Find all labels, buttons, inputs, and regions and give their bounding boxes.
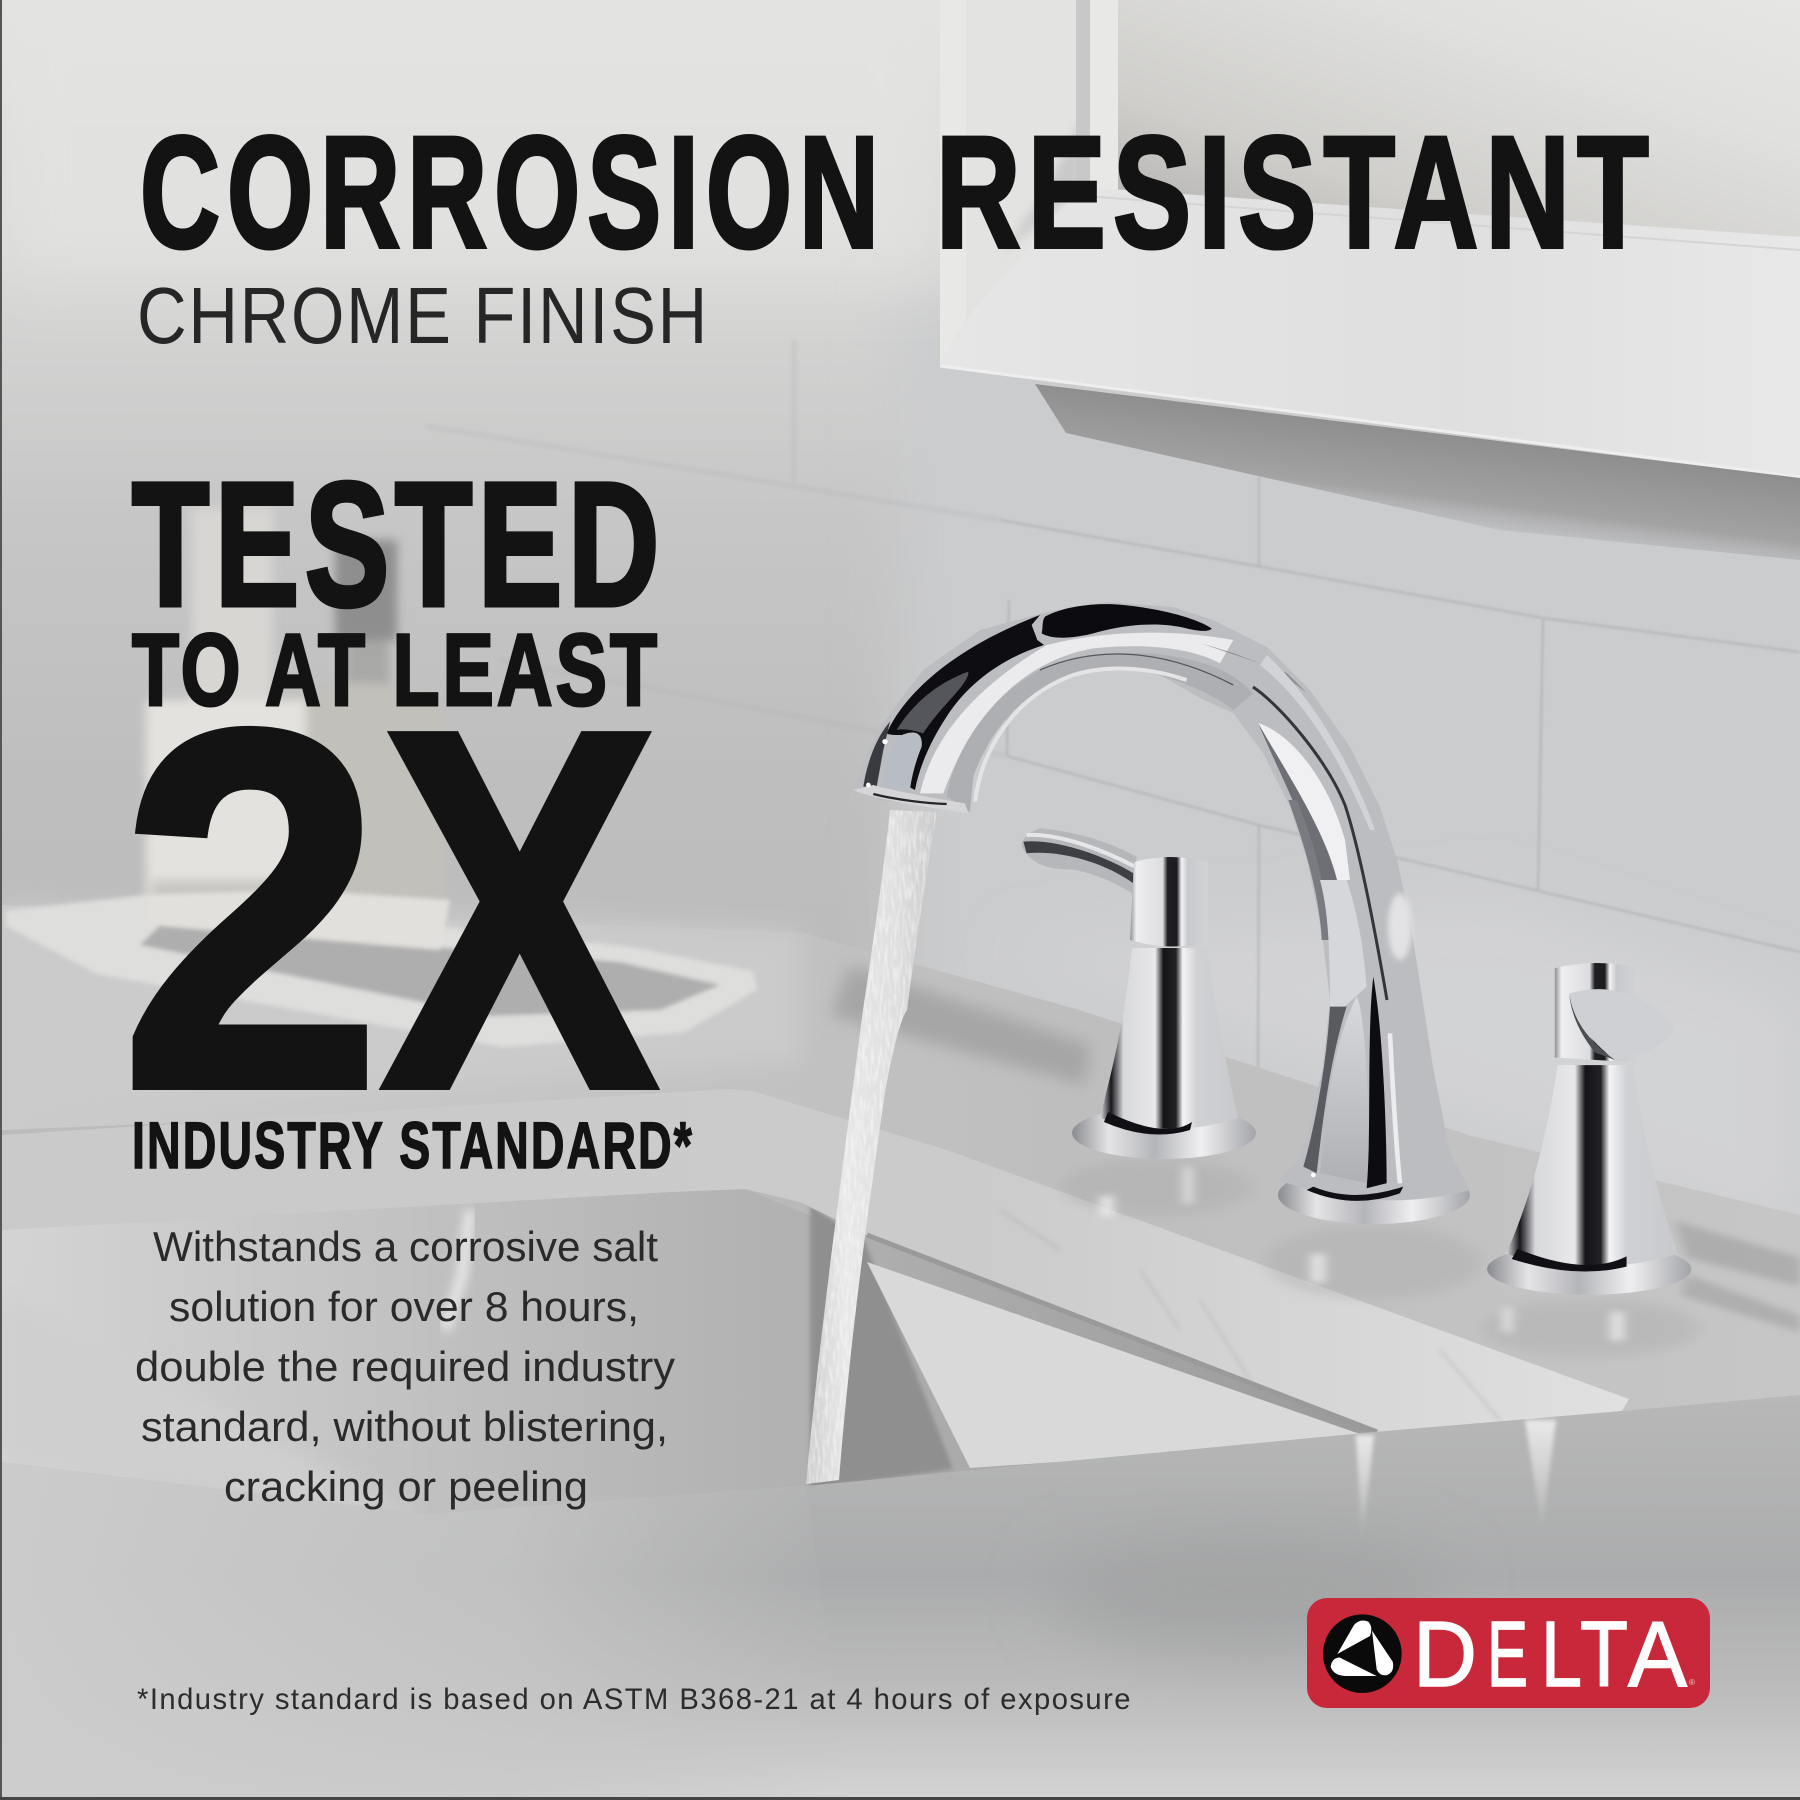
handle lever xyxy=(1022,828,1137,894)
arch highlights xyxy=(853,604,1253,813)
wordmark: A xyxy=(1628,1602,1687,1706)
mirror and white frame xyxy=(940,0,1800,477)
faint blurred left tile lines xyxy=(426,340,1007,756)
back counter xyxy=(0,905,1800,1411)
registered mark: ® xyxy=(1689,1678,1695,1687)
shadow under frame xyxy=(1035,384,1800,560)
faucet shadow on counter xyxy=(830,965,1090,1085)
left handle xyxy=(1022,828,1256,1159)
headline: 2X: X xyxy=(381,625,660,1195)
wordmark: E xyxy=(1487,1602,1528,1706)
near marble counter xyxy=(0,1395,1800,1800)
body text: cracking or peeling xyxy=(224,1463,588,1510)
faucet xyxy=(853,602,1691,1295)
body text xyxy=(135,1223,675,1510)
headline: Tested: TESTED xyxy=(132,447,665,643)
headline: 2X: 2 xyxy=(120,625,382,1195)
Delta logo xyxy=(1307,1598,1710,1708)
soap tray xyxy=(6,890,758,1047)
spout xyxy=(853,602,1470,1224)
image edge lines xyxy=(0,0,2,1800)
wall tile lines xyxy=(1000,460,1800,1075)
wordmark xyxy=(1413,1602,1687,1706)
body text: solution for over 8 hours, xyxy=(169,1283,639,1330)
leg highlights xyxy=(1288,800,1412,1201)
wall xyxy=(0,0,1800,1400)
headline: To at least: TO AT LEAST xyxy=(132,613,660,727)
headline: 2X xyxy=(120,625,660,1195)
soap bottles xyxy=(146,508,448,953)
subheading: Chrome Finish: CHROME FINISH xyxy=(137,271,709,360)
wordmark: T xyxy=(1580,1602,1628,1706)
icon: Delta triangle mark xyxy=(1323,1614,1402,1693)
right handle xyxy=(1487,963,1691,1295)
running water xyxy=(806,810,937,1484)
counter shadows and reflections xyxy=(1062,1158,1800,1357)
footnote: *Industry standard is based on ASTM B368-21 at 4 hours of exposure xyxy=(137,1683,1132,1716)
marble front face of counter xyxy=(0,1089,1629,1432)
body text: Withstands a corrosive salt xyxy=(153,1223,658,1270)
wordmark: L xyxy=(1541,1602,1582,1706)
arch-to-leg reflections xyxy=(1200,643,1387,1000)
body text: standard, without blistering, xyxy=(141,1403,668,1450)
body text: double the required industry xyxy=(135,1343,675,1390)
headline: Industry Standard: INDUSTRY STANDARD* xyxy=(132,1108,694,1182)
heading: Corrosion Resistant: CORROSION xyxy=(140,103,886,281)
basin interior xyxy=(0,1189,1377,1520)
wordmark: D xyxy=(1413,1602,1477,1706)
